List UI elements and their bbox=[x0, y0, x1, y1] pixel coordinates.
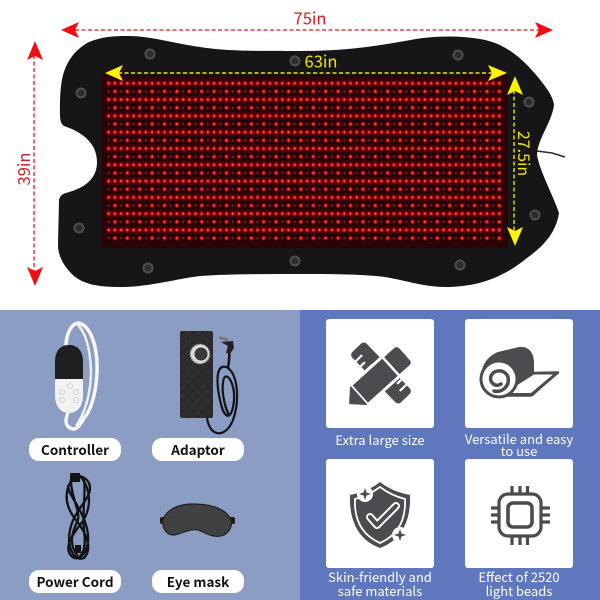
arrow: 75in width bbox=[61, 22, 553, 38]
snap buttons bbox=[74, 50, 540, 272]
power cord bbox=[67, 473, 90, 559]
caption: Versatile and easy to use: Versatile and easy bbox=[465, 429, 573, 448]
card: versatile bbox=[465, 319, 573, 428]
black mat outline bbox=[58, 36, 559, 287]
label pill: Power Cord: Power Cord bbox=[36, 571, 114, 591]
icon: pencil and ruler bbox=[339, 341, 416, 415]
icon: chip bbox=[491, 486, 550, 545]
caption: Effect of 2520 light beads: light beads bbox=[486, 581, 552, 600]
label: 75in: 75in bbox=[294, 6, 326, 30]
eye mask bbox=[160, 504, 235, 536]
caption: Extra large size: Extra large size bbox=[335, 430, 425, 449]
caption: Effect of 2520 light beads: Effect of 2520 bbox=[478, 567, 560, 586]
label pill: Adaptor: Adaptor bbox=[170, 439, 225, 459]
caption: Versatile and easy to use: to use bbox=[501, 441, 537, 460]
mat cable bbox=[537, 151, 565, 157]
label pill: Adaptor bbox=[152, 438, 244, 461]
features background bbox=[300, 310, 600, 600]
label: 27.5in: 27.5in bbox=[513, 131, 537, 176]
arrow: 27.5in panel height bbox=[507, 76, 523, 246]
card: light beads bbox=[465, 459, 573, 568]
label: 39in: 39in bbox=[11, 153, 35, 185]
label pill: Eye mask bbox=[152, 570, 244, 593]
caption: Skin-friendly and safe materials: safe materials bbox=[338, 581, 422, 600]
label pill: Controller bbox=[29, 438, 121, 461]
label pill: Controller: Controller bbox=[41, 439, 109, 459]
label pill: Eye mask: Eye mask bbox=[167, 571, 230, 591]
adaptor bbox=[180, 331, 237, 433]
card: extra large size bbox=[326, 319, 434, 428]
arrow: 39in height bbox=[27, 41, 43, 286]
LED grid bbox=[106, 79, 502, 242]
accessories background bbox=[0, 310, 300, 600]
icon: shield with check bbox=[350, 482, 410, 548]
caption: Skin-friendly and safe materials: Skin-friendly and bbox=[328, 567, 432, 586]
icon: rolled mat bbox=[481, 347, 559, 397]
panel: features bbox=[300, 310, 600, 600]
panel: accessories bbox=[0, 310, 300, 600]
LED backing panel bbox=[102, 75, 508, 248]
controller bbox=[55, 323, 97, 429]
panel: light therapy mat with dimensions bbox=[11, 6, 565, 287]
arrow: 63in panel width bbox=[105, 65, 507, 81]
label: 63in: 63in bbox=[305, 48, 337, 72]
card: skin-friendly bbox=[326, 459, 434, 568]
